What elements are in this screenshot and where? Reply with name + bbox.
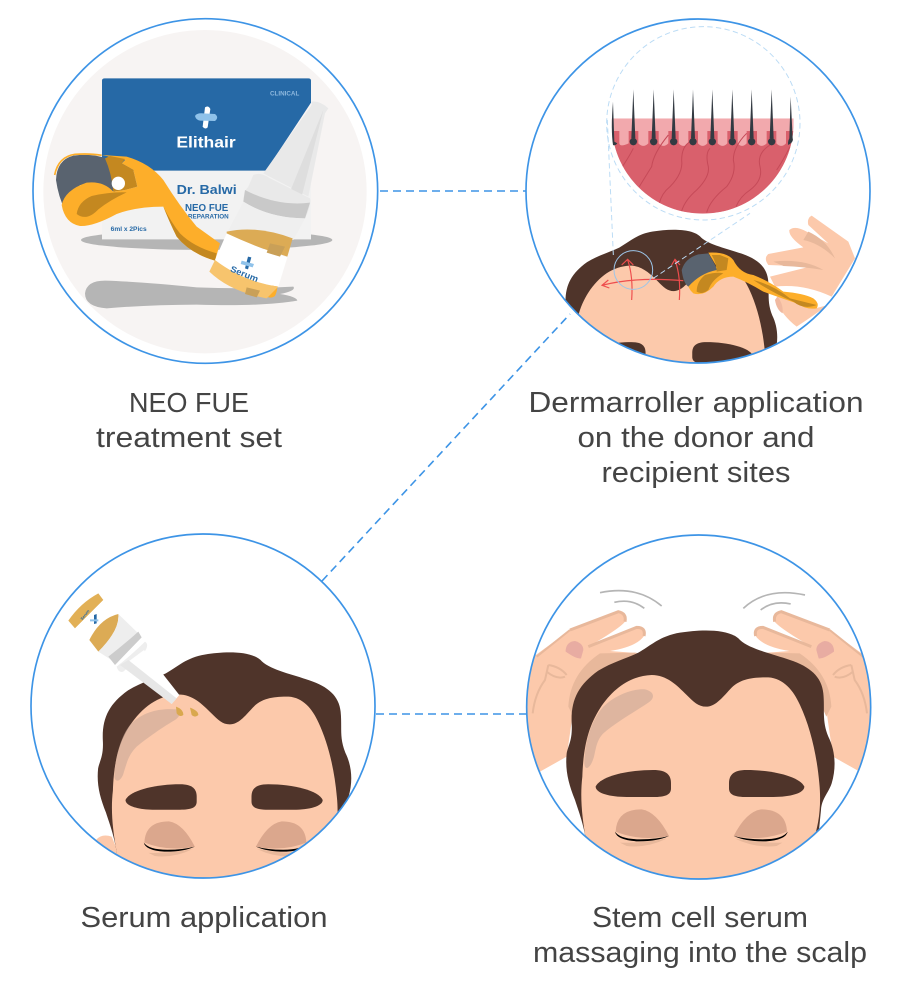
icon: brand cross — [195, 106, 217, 129]
treatment box: NEO FUE — [185, 203, 229, 214]
caption: Dermarroller application: recipient sites — [602, 457, 790, 489]
left hand — [523, 612, 644, 772]
caption: NEO FUE treatment set — [96, 387, 282, 454]
panel: Serum application — [31, 534, 375, 891]
serum smear — [584, 689, 653, 768]
head — [566, 630, 835, 883]
caption: Dermarroller application: on the donor and — [578, 422, 814, 454]
caption: Serum application: Serum application — [80, 902, 328, 934]
connector: set to dermaroller — [380, 190, 526, 192]
panel: Dermaroller application — [525, 18, 871, 364]
ear — [96, 836, 117, 854]
shadow under roller — [85, 281, 297, 308]
caption: Dermarroller application: Dermarroller application — [528, 387, 864, 419]
connector: serum to massage — [376, 713, 527, 715]
dermaroller — [682, 253, 818, 309]
caption: Stem cell serum massaging: massaging into the scalp — [533, 937, 867, 969]
magnified skin section — [607, 27, 800, 223]
caption: Stem cell serum massaging: Stem cell serum — [592, 902, 808, 934]
caption: Dermarroller application — [528, 387, 864, 489]
serum bottle: Serum — [229, 264, 260, 284]
massage arrows — [602, 259, 683, 300]
serum smear — [114, 709, 180, 781]
connector: dermaroller to serum — [322, 314, 570, 581]
icon: label cross — [241, 257, 254, 269]
treatment box: Dr. Balwi — [177, 183, 237, 197]
hair follicles — [612, 89, 793, 145]
caption: NEO FUE treatment set: treatment set — [96, 422, 282, 454]
serum drops — [176, 707, 183, 716]
treatment box: 6ml x 2Pics — [111, 227, 147, 233]
shadow under box — [81, 234, 332, 250]
right hand — [755, 612, 876, 772]
treatment box: Elithair — [176, 134, 236, 151]
treatment box: REPARATION — [188, 213, 229, 220]
serum bottle — [209, 102, 328, 298]
dermaroller — [55, 154, 277, 298]
guide lines — [607, 120, 750, 278]
caption: Stem cell serum massaging — [533, 902, 867, 969]
caption: NEO FUE treatment set: NEO FUE — [129, 387, 249, 418]
skin vessels — [620, 133, 790, 213]
serum bottle — [68, 593, 179, 704]
treatment box: CLINICAL — [270, 92, 300, 98]
hand — [766, 216, 855, 327]
head — [98, 652, 351, 891]
treatment box — [102, 78, 311, 239]
panel: NEO FUE treatment set — [33, 19, 378, 363]
target circle — [614, 251, 653, 289]
panel: Stem cell serum massaging — [523, 535, 876, 883]
head — [566, 230, 778, 362]
serum bottle: Serum — [80, 608, 91, 621]
motion lines — [600, 591, 805, 610]
